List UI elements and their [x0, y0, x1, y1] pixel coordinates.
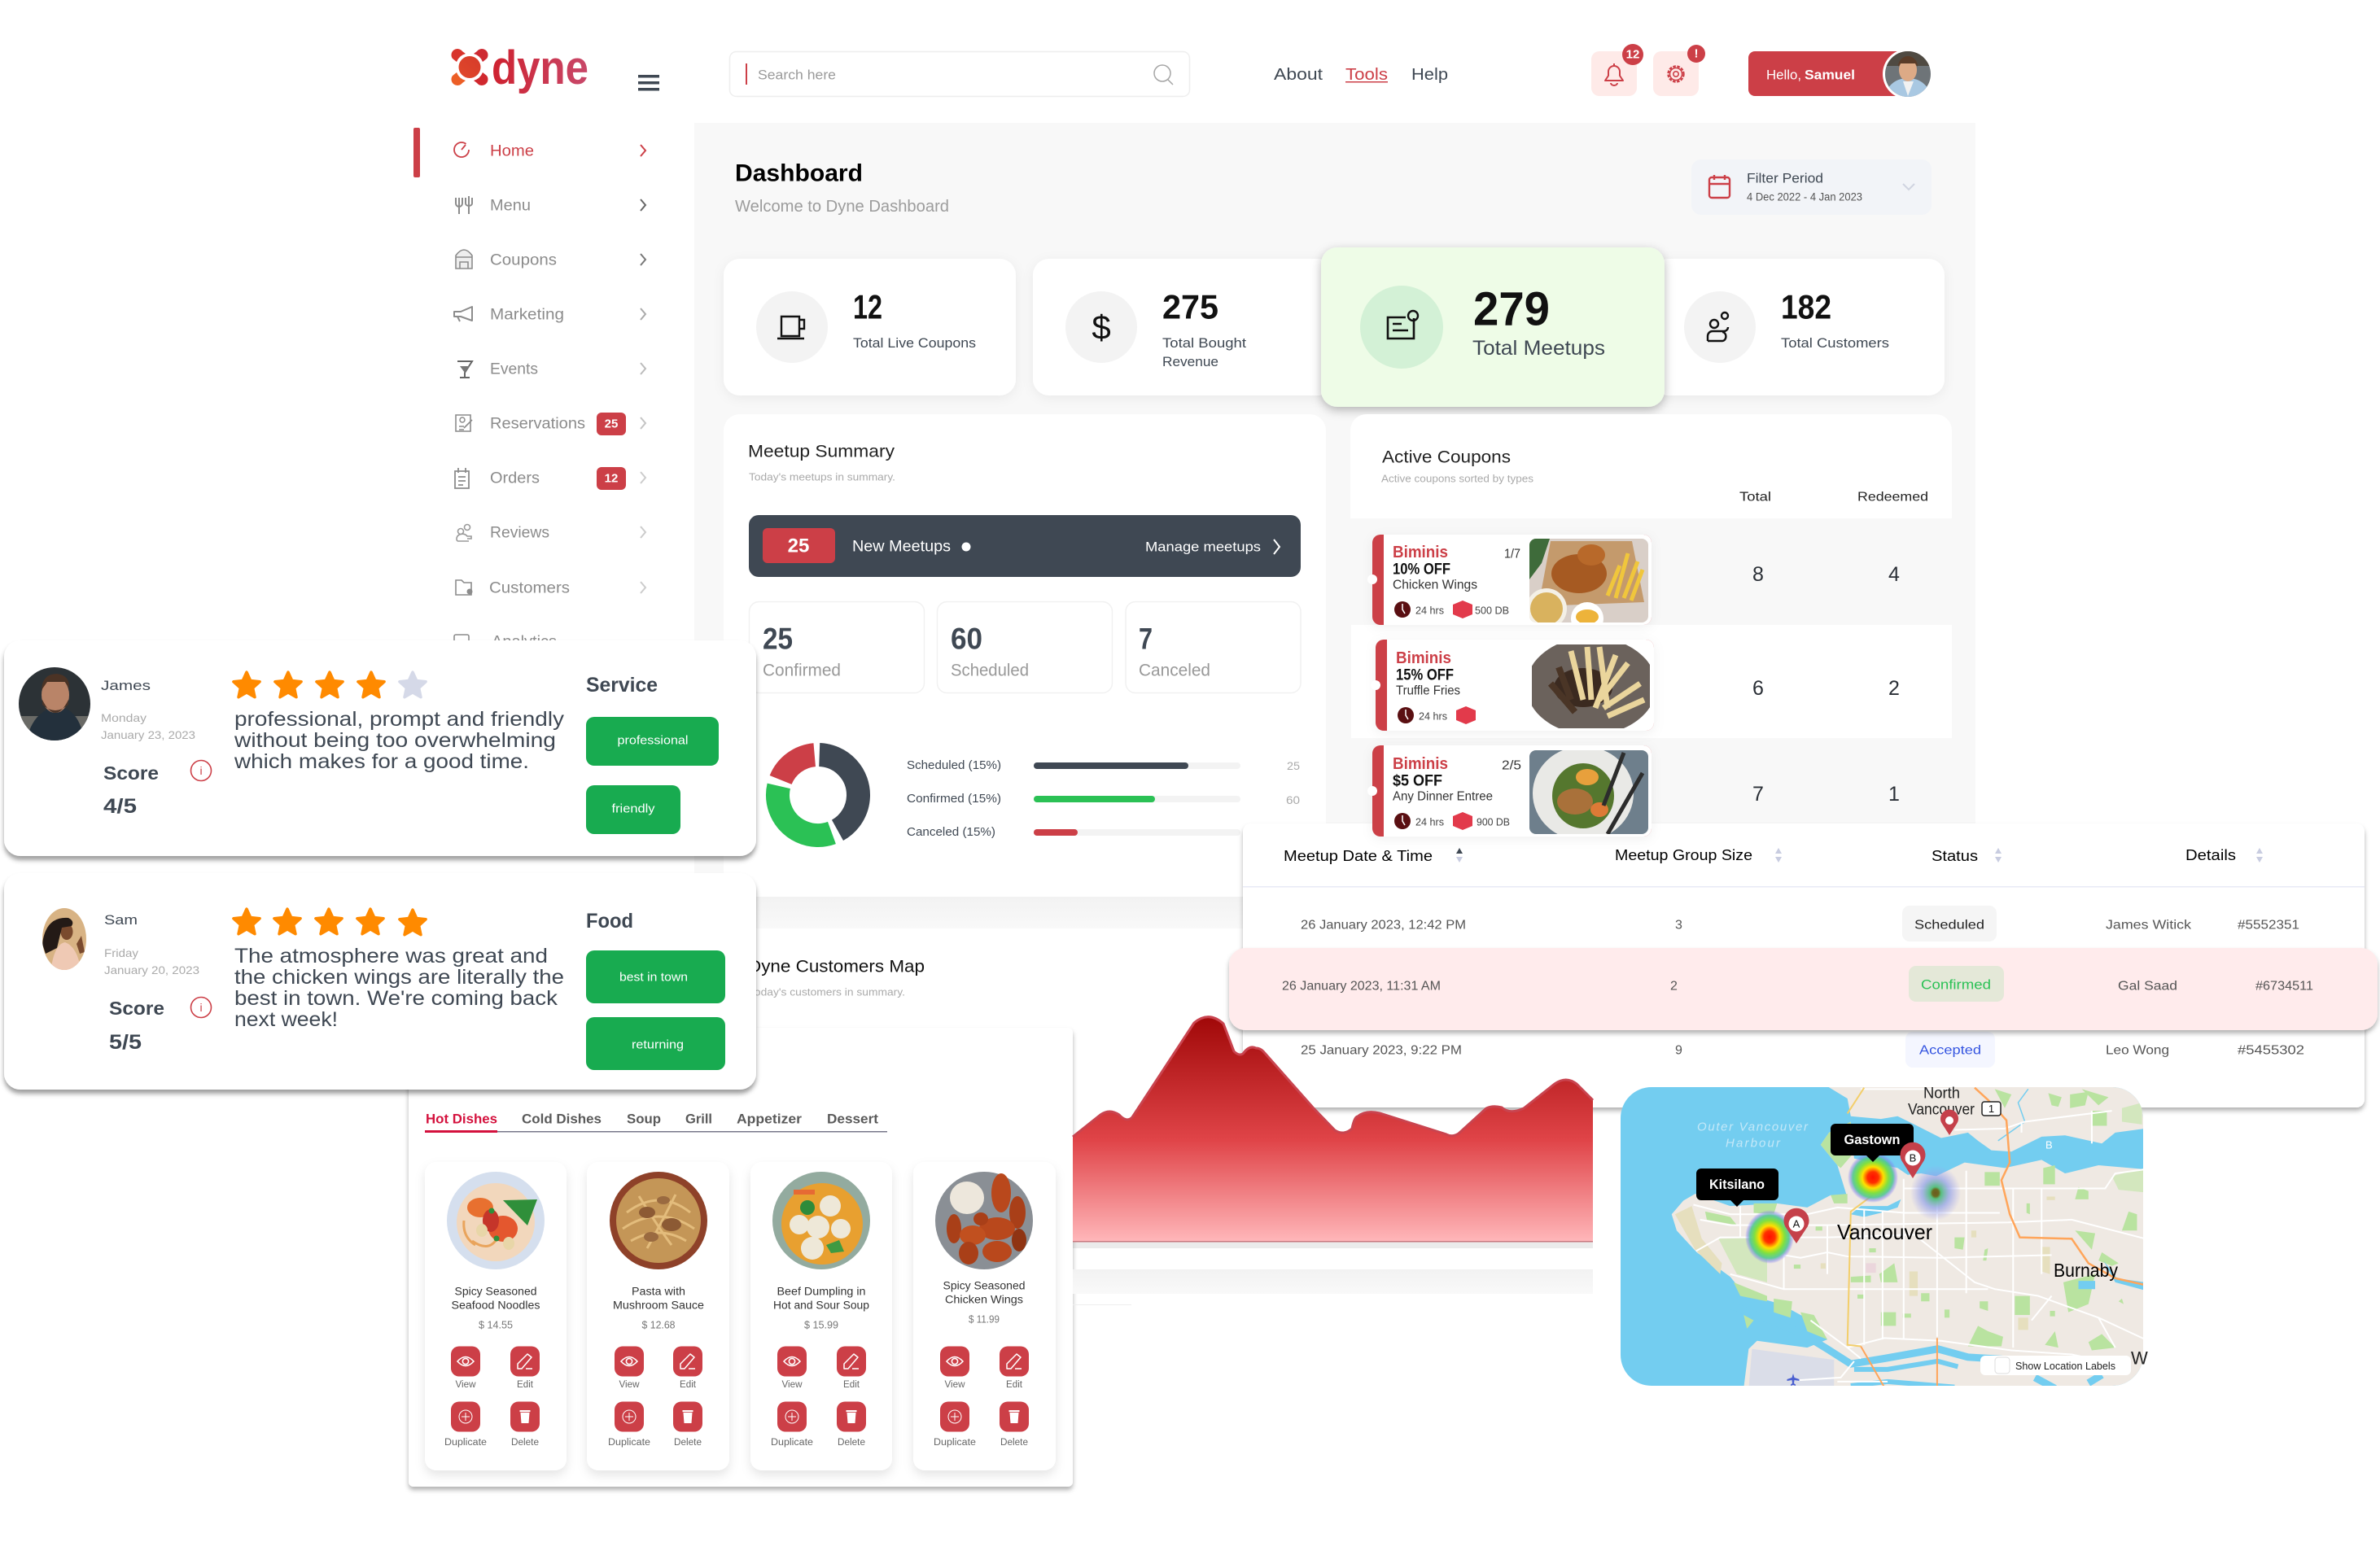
- reviewer details: James: [101, 679, 195, 741]
- tooltip: Gastown: [1831, 1124, 1914, 1162]
- bar: Canceled: [907, 826, 1240, 839]
- review text: James: which makes for a good time.: [234, 750, 529, 773]
- reviewer details: James: James: [101, 679, 151, 693]
- table row: Leo Wong: [1301, 1032, 2304, 1068]
- review category: Service: professional: [617, 734, 689, 747]
- score: 5/5: Score: [109, 998, 164, 1019]
- coupon counts: [1752, 563, 1900, 806]
- action buttons: View: [944, 1380, 965, 1390]
- score: 4/5: i: [199, 764, 203, 777]
- bar: Scheduled: Scheduled (15%): [907, 759, 1001, 772]
- logo: dyne: dyne: [492, 41, 588, 94]
- food photo: truffle fries: [1532, 644, 1650, 728]
- highlighted table row: Gal Saad: #6734511: [2255, 980, 2313, 993]
- table header: Meetup Date & Time: [1284, 848, 1433, 864]
- header bar: [729, 44, 1931, 98]
- dish card: Spicy Seasoned Chicken Wings: [913, 1162, 1056, 1470]
- score: 5/5: i: [199, 1001, 203, 1014]
- panel: dishes: [409, 1028, 1073, 1487]
- heatmap: Kitsilano: [1745, 1210, 1794, 1264]
- tooltip: Gastown: Gastown: [1844, 1133, 1900, 1147]
- KPI card: Total Customers: [1652, 259, 1945, 395]
- table row: James Witick: 26 January 2023, 12:42 PM: [1301, 918, 1466, 933]
- avatar: Sam: [42, 908, 86, 970]
- action buttons: View: [456, 1380, 476, 1390]
- coupon counts: 8: [1752, 563, 1764, 586]
- menu item: Coupons: Coupons: [490, 252, 557, 269]
- action buttons: Edit: [517, 1380, 534, 1390]
- coupon: 15% OFF Truffle Fries: Truffle Fries: [1396, 684, 1460, 698]
- reviewer details: James: January 23, 2023: [101, 728, 195, 741]
- coupon: $5 OFF Any Dinner Entree: 2/5: [1502, 758, 1521, 773]
- score: 4/5: Score: [103, 762, 159, 784]
- dish card: Beef Dumpling in Hot and Sour Soup: [750, 1162, 892, 1470]
- coupon counts: 2: [1888, 677, 1900, 700]
- coupon: 10% OFF Chicken Wings: Biminis: [1393, 544, 1448, 561]
- KPI card: Total Bought Revenue: Revenue: [1162, 355, 1218, 369]
- category tabs: Cold Dishes: [522, 1112, 602, 1126]
- action buttons: Duplicate: [444, 1438, 487, 1448]
- new meetups banner: New Meetups: [852, 539, 951, 555]
- coupon: 10% OFF Chicken Wings: 500 DB: [1475, 604, 1509, 617]
- map pin: B: B: [1910, 1152, 1916, 1164]
- food photo: pasta: [610, 1172, 707, 1269]
- map labels: place names: Burnaby: [2054, 1260, 2118, 1281]
- stat box: Confirmed: Confirmed: [763, 661, 841, 680]
- action buttons: Delete: [674, 1438, 702, 1448]
- coupon counts: 1: [1888, 783, 1900, 806]
- KPI card: Total Meetups (highlighted): 279: [1473, 283, 1550, 335]
- map labels: place names: Vancouver: [1837, 1220, 1932, 1244]
- review text: James: [234, 708, 565, 773]
- table row: Leo Wong: 25 January 2023, 9:22 PM: [1301, 1043, 1462, 1058]
- coupon counts: 6: [1752, 677, 1764, 700]
- show location labels control: Show Location Labels: [2015, 1361, 2115, 1372]
- menu item: Events: Events: [490, 361, 538, 378]
- stat box: Confirmed: 25: [763, 622, 793, 656]
- reviewer details: Sam: [104, 913, 199, 976]
- map: vancouver heatmap: [1621, 1086, 2148, 1388]
- top navigation links: Tools: [1345, 66, 1388, 84]
- stat box: Canceled: [1126, 602, 1301, 693]
- bar: Confirmed: 60: [1286, 793, 1300, 806]
- active menu indicator: [413, 128, 420, 177]
- score: 5/5: 5/5: [109, 1031, 142, 1054]
- table row: James Witick: Scheduled: [1914, 918, 1984, 933]
- panel: active coupons header and rows: Redeemed: [1857, 490, 1928, 505]
- area chart: [1073, 1017, 1593, 1248]
- sidebar: [413, 41, 659, 651]
- review text: Sam: next week!: [234, 1008, 338, 1031]
- stat box: Scheduled: Scheduled: [951, 661, 1029, 680]
- action buttons: Duplicate: [771, 1438, 813, 1448]
- reviewer details: Sam: Friday: [104, 946, 138, 959]
- show location labels control: [1980, 1356, 2131, 1375]
- filter period selector: Filter Period: [1747, 171, 1823, 186]
- map labels: place names: North: [1923, 1086, 1960, 1102]
- parks: [1705, 1089, 2146, 1350]
- filter period selector: [1691, 159, 1932, 215]
- bar: Canceled: Canceled (15%): [907, 826, 995, 839]
- review text: Sam: best in town. We're coming back: [234, 987, 558, 1010]
- menu item: Home: [454, 142, 645, 159]
- review category: Food: Food: [586, 910, 633, 933]
- dish card: Spicy Seasoned Seafood Noodles: Seafood Noodles: [451, 1299, 540, 1312]
- menu item: Home: Home: [490, 143, 534, 159]
- map labels: place names: 1: [1988, 1103, 1994, 1115]
- review text: Sam: the chicken wings are literally the: [234, 966, 564, 989]
- tooltip: Kitsilano: [1696, 1169, 1778, 1207]
- action buttons: Edit: [680, 1380, 697, 1390]
- menu item: Reservations with badge: Reservations: [490, 415, 585, 433]
- review category: Food: best in town: [619, 970, 688, 985]
- action buttons: View: [781, 1380, 803, 1390]
- menu item: Reservations with badge: 25: [605, 417, 618, 431]
- coupon: 15% OFF Truffle Fries: 24 hrs: [1419, 710, 1447, 723]
- highlighted table row: Gal Saad: Gal Saad: [2118, 980, 2177, 993]
- menu item: Analytics (partly hidden): Analytics: [492, 633, 557, 651]
- waterways: [1851, 1199, 1901, 1217]
- reviewer details: Sam: Sam: [104, 913, 138, 928]
- dish card: Beef Dumpling in Hot and Sour Soup: $ 15.99: [804, 1318, 838, 1331]
- coupon: 10% OFF Chicken Wings: Chicken Wings: [1393, 578, 1477, 592]
- KPI card: Total Meetups (highlighted): [1321, 247, 1665, 407]
- review text: James: professional, prompt and friendly: [234, 708, 565, 731]
- panel: dyne customers map heading: Dyne Customers Map: [748, 957, 925, 976]
- category tabs: Dessert: [827, 1112, 878, 1126]
- coupon: $5 OFF Any Dinner Entree: Biminis: [1393, 755, 1448, 773]
- menu item: Reviews: [457, 524, 645, 542]
- action buttons: [934, 1346, 1029, 1448]
- action buttons: View: [619, 1380, 640, 1390]
- tooltip: Kitsilano: Kitsilano: [1709, 1177, 1765, 1192]
- dish card: Pasta with Mushroom Sauce: Pasta with: [632, 1286, 685, 1297]
- action buttons: Duplicate: [934, 1438, 976, 1448]
- highlighted table row: Gal Saad: 2: [1670, 980, 1678, 993]
- stat box: Scheduled: [938, 602, 1112, 693]
- menu item: Events: [457, 361, 645, 378]
- user greeting button: Hello,: [1766, 67, 1801, 83]
- action buttons: Duplicate: [608, 1438, 650, 1448]
- category tabs: Soup: [627, 1112, 661, 1126]
- map labels: place names: W: [2131, 1348, 2148, 1369]
- menu item: Menu: Menu: [490, 197, 531, 215]
- panel: active coupons header and rows: Total: [1739, 490, 1771, 505]
- menu item: Analytics (partly hidden): [454, 633, 557, 651]
- review text: Sam: The atmosphere was great and: [234, 945, 548, 968]
- map pin: A: A: [1793, 1217, 1800, 1230]
- user greeting button: Samuel: [1805, 67, 1855, 83]
- top navigation links: About: [1274, 66, 1323, 84]
- menu item: Orders with badge: Orders: [490, 470, 540, 487]
- table header: Details: [2185, 847, 2236, 863]
- stat box: Canceled: Canceled: [1139, 661, 1210, 680]
- icon: notification bell with badge: 12: [1626, 47, 1639, 62]
- review category: Food: returning: [632, 1038, 684, 1051]
- coupon: 15% OFF Truffle Fries: 15% OFF: [1396, 667, 1454, 684]
- KPI card: Total Live Coupons: [724, 259, 1016, 395]
- point grey and UBC lands: [1675, 1206, 1722, 1274]
- coupon counts: 4: [1888, 563, 1900, 586]
- dish card: Beef Dumpling in Hot and Sour Soup: Beef Dumpling in: [777, 1286, 866, 1297]
- dish card: Spicy Seasoned Chicken Wings: Spicy Seasoned: [943, 1279, 1026, 1292]
- logo: dyne: [452, 41, 588, 94]
- bar: Confirmed: [907, 793, 1300, 806]
- coupon: 10% OFF Chicken Wings: 1/7: [1504, 547, 1520, 561]
- bar: Scheduled: [907, 759, 1300, 772]
- KPI card: Total Bought Revenue: $: [1092, 308, 1111, 347]
- coupon: 15% OFF Truffle Fries: Biminis: [1396, 649, 1451, 667]
- filter period selector: 4 Dec 2022 - 4 Jan 2023: [1747, 190, 1862, 203]
- star rating: 4 of 5: [234, 672, 426, 697]
- action buttons: [771, 1346, 866, 1448]
- dish card: Beef Dumpling in Hot and Sour Soup: Hot and Sour Soup: [773, 1299, 869, 1312]
- category tabs: Grill: [685, 1112, 712, 1126]
- dashboard title: [735, 159, 949, 216]
- panel: dyne customers map heading: [724, 928, 1243, 1028]
- highlighted table row: Gal Saad: [1229, 948, 2378, 1030]
- icon: hamburger menu: [638, 75, 659, 91]
- map label: Outer Vancouver Harbour: [1697, 1120, 1809, 1151]
- panel: active coupons header and rows: Active Coupons: [1382, 448, 1511, 467]
- food photo: dumplings: [772, 1172, 870, 1269]
- vancouver land: [1672, 1121, 2146, 1388]
- meetup summary heading: [748, 443, 895, 483]
- map labels: place names: B: [2045, 1139, 2053, 1151]
- top navigation links: [1274, 66, 1448, 84]
- map labels: place names: [1837, 1086, 2148, 1369]
- menu item: Orders with badge: [455, 467, 645, 490]
- panel: active coupons header and rows: Active coupons sorted by types: [1381, 472, 1534, 485]
- food photo: noodles: [447, 1172, 545, 1269]
- coupon: 15% OFF Truffle Fries: [1371, 637, 1656, 735]
- new meetups banner: 25: [788, 535, 809, 557]
- highlighted table row: Gal Saad: Confirmed: [1921, 976, 1991, 993]
- review category: Food: [586, 910, 725, 1070]
- icon: airport plane: [1787, 1374, 1799, 1386]
- menu item: Orders with badge: 12: [605, 472, 618, 485]
- table row: Leo Wong: Accepted: [1919, 1043, 1981, 1058]
- dish card: Spicy Seasoned Chicken Wings: Chicken Wings: [945, 1294, 1023, 1305]
- menu item: Reviews: Reviews: [490, 524, 549, 542]
- category tabs: Appetizer: [737, 1112, 802, 1126]
- action buttons: Delete: [511, 1438, 539, 1448]
- icon: settings gear with badge: !: [1695, 47, 1698, 60]
- menu item: Reservations with badge: [456, 413, 645, 435]
- user greeting button: [1748, 51, 1931, 97]
- food photo: fried chicken: [1529, 539, 1648, 622]
- KPI card: Total Meetups (highlighted): Total Meetups: [1472, 337, 1605, 360]
- menu item: Customers: [456, 579, 645, 597]
- panel: dyne customers map heading: Today's customers in summary.: [749, 986, 905, 998]
- review card: Sam: [4, 873, 756, 1090]
- new meetups banner: [749, 515, 1301, 577]
- menu item: Customers: Customers: [489, 579, 570, 597]
- heatmap: east vancouver: [1910, 1165, 1961, 1221]
- score: 5/5: [109, 998, 212, 1054]
- meetup summary heading: Meetup Summary: [748, 443, 895, 461]
- score: 4/5: [103, 760, 212, 818]
- dashboard title: Dashboard: [735, 159, 863, 187]
- reviewer details: Sam: January 20, 2023: [104, 963, 199, 976]
- menu item: Marketing: Marketing: [490, 306, 564, 324]
- KPI card: Total Live Coupons: 12: [853, 288, 882, 325]
- coupon: $5 OFF Any Dinner Entree: 900 DB: [1477, 815, 1510, 828]
- category tabs: Hot Dishes: [426, 1112, 497, 1126]
- dish card: Pasta with Mushroom Sauce: Mushroom Sauce: [613, 1299, 704, 1312]
- menu item: Marketing: [454, 306, 645, 324]
- airport: [1748, 1349, 1834, 1388]
- table header: Meetup Group Size: [1615, 847, 1752, 863]
- coupon: $5 OFF Any Dinner Entree: $5 OFF: [1393, 773, 1442, 789]
- map label: Outer Vancouver Harbour: Harbour: [1726, 1136, 1781, 1151]
- star rating: 5 of 5: [234, 909, 426, 935]
- action buttons: Edit: [1006, 1380, 1023, 1390]
- review category: Service: [586, 674, 719, 834]
- avatar: James: [19, 667, 90, 740]
- coupon counts: 7: [1752, 783, 1764, 806]
- table row: James Witick: 3: [1675, 918, 1682, 933]
- heatmap: Gastown: [1848, 1152, 1898, 1203]
- map label: Outer Vancouver Harbour: Outer Vancouver: [1697, 1120, 1809, 1134]
- stat box: Scheduled: 60: [951, 622, 982, 656]
- icon: settings gear with badge: [1653, 45, 1705, 96]
- KPI card: Total Customers: 182: [1781, 288, 1831, 325]
- table row: Leo Wong: #5455302: [2238, 1043, 2304, 1058]
- map labels: place names: Vancouver: [1908, 1102, 1975, 1118]
- coupon: 10% OFF Chicken Wings: [1367, 535, 1652, 635]
- review category: Service: friendly: [612, 802, 655, 815]
- action buttons: [608, 1346, 702, 1448]
- table header: Status: [1932, 848, 1978, 864]
- new meetups banner: Manage meetups: [1145, 539, 1261, 555]
- panel: meetup summary: [724, 414, 1326, 897]
- menu item: Menu: [456, 196, 645, 215]
- review card: James: [4, 640, 756, 856]
- donut chart: [766, 743, 870, 847]
- bar: Scheduled: 25: [1287, 759, 1300, 772]
- stat box: Canceled: 7: [1139, 622, 1153, 656]
- menu item: Coupons: [456, 250, 645, 269]
- table row: James Witick: [1301, 906, 2299, 941]
- dish card: Spicy Seasoned Seafood Noodles: [425, 1162, 567, 1470]
- icon: notification bell with badge: [1591, 44, 1643, 96]
- KPI card: Total Bought Revenue: [1033, 259, 1334, 395]
- dish card: Pasta with Mushroom Sauce: $ 12.68: [641, 1318, 676, 1331]
- table row: Leo Wong: 9: [1675, 1043, 1682, 1058]
- panel: active coupons header and rows: [1350, 414, 1952, 806]
- review category: Service: Service: [586, 674, 658, 697]
- coupon: $5 OFF Any Dinner Entree: 24 hrs: [1415, 815, 1444, 828]
- dish card: Spicy Seasoned Chicken Wings: $ 11.99: [969, 1313, 1000, 1325]
- progress bars: [907, 759, 1300, 839]
- coupon: 10% OFF Chicken Wings: 10% OFF: [1393, 561, 1450, 578]
- top navigation links: Help: [1411, 66, 1448, 84]
- table row: James Witick: James Witick: [2106, 918, 2192, 933]
- coupon: $5 OFF Any Dinner Entree: Any Dinner Entree: [1393, 789, 1493, 804]
- action buttons: Delete: [1000, 1438, 1028, 1448]
- action buttons: Delete: [838, 1438, 865, 1448]
- search box: [729, 52, 1190, 96]
- score: 4/5: 4/5: [103, 795, 137, 818]
- roads: [1693, 1089, 2146, 1382]
- stat box: Confirmed: [749, 602, 925, 693]
- bar: Confirmed: Confirmed (15%): [907, 793, 1001, 806]
- panel: meetup table: [1243, 823, 2365, 1107]
- action buttons: [444, 1346, 540, 1448]
- search box: Search here: [758, 67, 836, 83]
- map pin: North Vancouver: [1940, 1110, 1958, 1135]
- table row: James Witick: #5552351: [2238, 918, 2299, 933]
- coupon cards: [1367, 535, 1656, 841]
- KPI card: Total Bought Revenue: 275: [1162, 288, 1218, 325]
- coupon: $5 OFF Any Dinner Entree: [1367, 745, 1652, 841]
- north shore land: [1827, 1086, 2146, 1151]
- review text: James: without being too overwhelming: [234, 729, 556, 752]
- tan and pink land patches: [1821, 1196, 2055, 1330]
- reviewer details: James: Monday: [101, 711, 147, 724]
- coupon: 10% OFF Chicken Wings: 24 hrs: [1415, 604, 1444, 617]
- KPI card: Total Live Coupons: Total Live Coupons: [853, 336, 976, 351]
- action buttons: Edit: [843, 1380, 860, 1390]
- dish card: Spicy Seasoned Seafood Noodles: $ 14.55: [479, 1318, 513, 1331]
- dashboard title: Welcome to Dyne Dashboard: [735, 198, 949, 216]
- KPI card: Total Customers: Total Customers: [1781, 336, 1889, 351]
- dashboard grey background: [694, 123, 1975, 928]
- chart footer band: [1073, 1269, 1593, 1305]
- category tabs: [425, 1112, 887, 1133]
- meetup summary heading: Today's meetups in summary.: [749, 470, 895, 483]
- table row: Leo Wong: Leo Wong: [2106, 1043, 2169, 1058]
- KPI cards row: [724, 247, 1945, 407]
- dish card: Spicy Seasoned Seafood Noodles: Spicy Seasoned: [454, 1286, 537, 1297]
- food photo: dinner plate: [1529, 750, 1648, 834]
- KPI card: Total Bought Revenue: Total Bought: [1162, 336, 1246, 351]
- review text: Sam: [234, 945, 564, 1031]
- dish card: Pasta with Mushroom Sauce: [587, 1162, 729, 1470]
- map pin: B: [1900, 1142, 1925, 1178]
- highlighted table row: Gal Saad: 26 January 2023, 11:31 AM: [1282, 980, 1441, 993]
- map pin: A: [1784, 1208, 1809, 1243]
- table header: [1243, 847, 2365, 887]
- food photo: chicken wings: [935, 1172, 1033, 1269]
